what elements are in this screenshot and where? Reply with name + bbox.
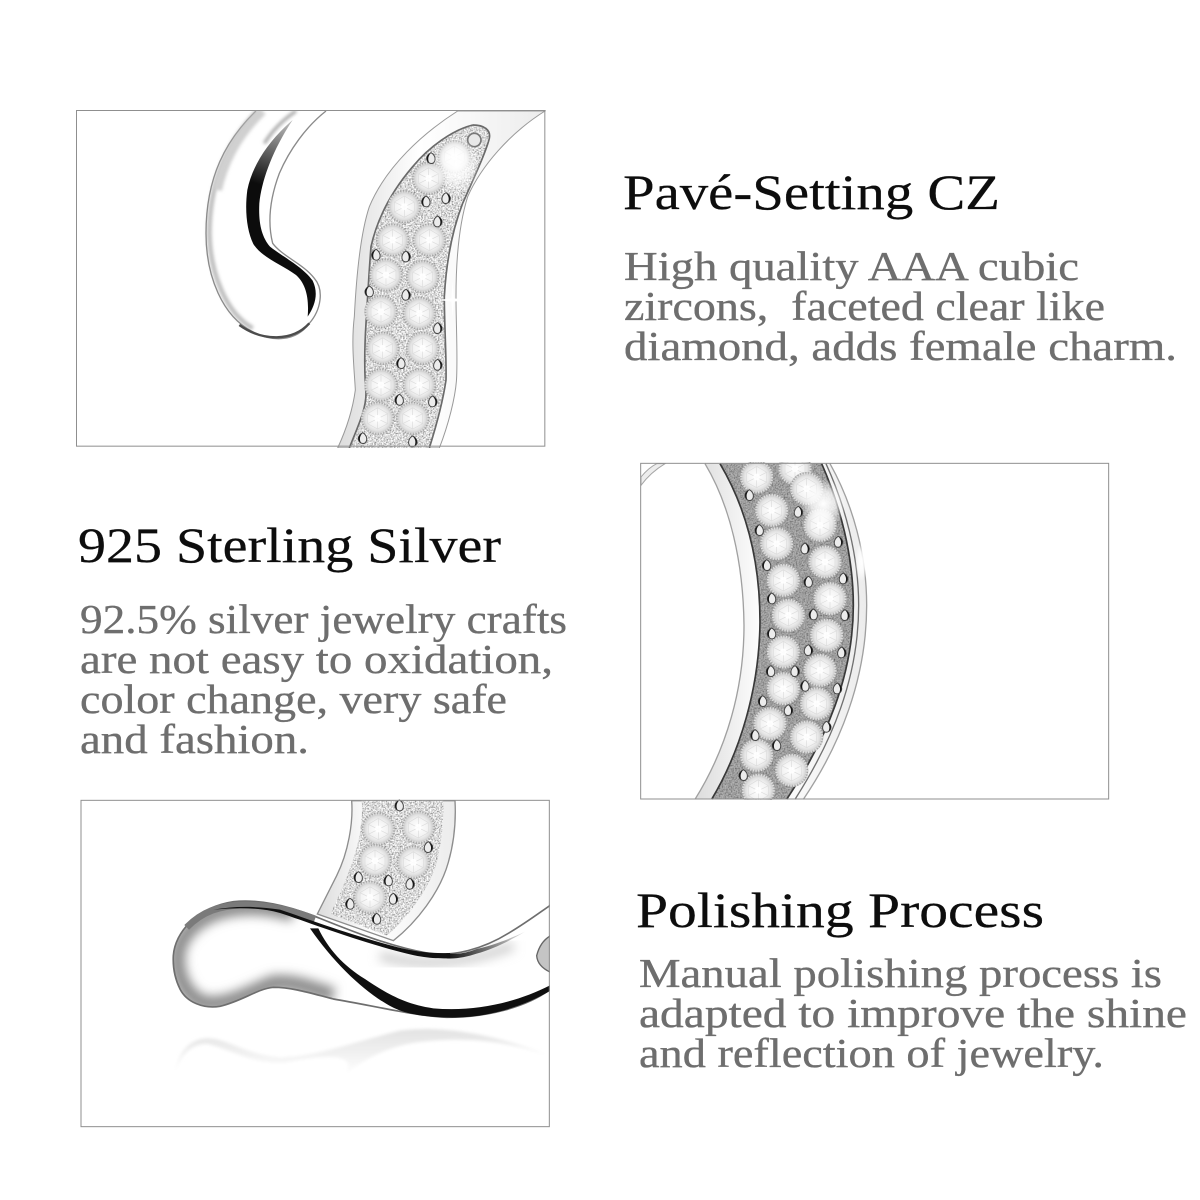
panel: polished wave photo [81,800,551,1127]
text block: CZ description: diamond, adds female charm. [624,323,1177,369]
text block: silver description [80,596,567,762]
icon: pave band with stones [338,111,545,448]
panel border [641,463,1109,799]
text block: polishing description: adapted to improve the shine [639,990,1187,1036]
panel: ring stones photo [641,452,1109,807]
icon: curved pave band [695,452,868,807]
text block: CZ description [624,243,1177,369]
icon: faint reflection [182,1028,518,1062]
icon: polished wave end [173,901,551,1018]
heading: Pave-Setting CZ: Pavé-Setting CZ [623,164,1000,220]
text block: polishing description [639,950,1187,1076]
text block: polishing description: and reflection of jewelry. [639,1030,1104,1076]
panel border [76,110,545,446]
heading: 925 Sterling Silver: 925 Sterling Silver [78,517,501,573]
panel: pave setting photo [76,110,545,448]
panel border [81,800,549,1127]
text block: silver description: color change, very safe [80,676,507,722]
icon: polished teardrop end [206,111,326,339]
text block: CZ description: High quality AAA cubic [624,243,1079,289]
icon: band with stones behind wave [317,800,455,941]
text block: polishing description: Manual polishing process is [639,950,1162,996]
text block: silver description: are not easy to oxidation, [80,636,553,682]
text block: silver description: and fashion. [80,716,309,762]
text block: silver description: 92.5% silver jewelry crafts [80,596,567,642]
text block: CZ description: zircons, faceted clear like [624,283,1105,329]
icon: thin ring arc [641,464,665,485]
heading: Polishing Process: Polishing Process [636,882,1044,938]
